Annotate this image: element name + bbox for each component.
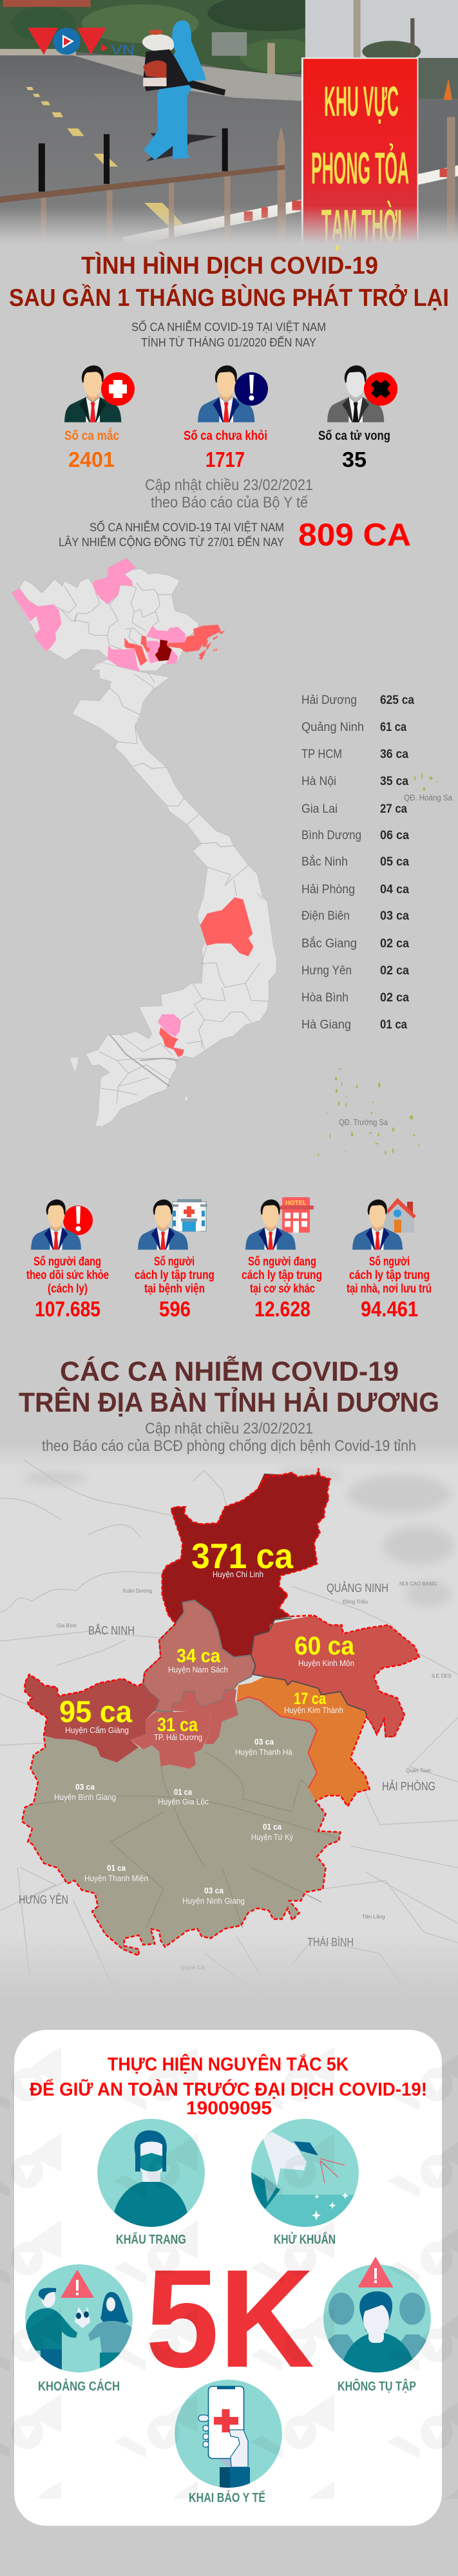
label: Kinh Mon: Huyện Kinh Môn (298, 1658, 354, 1668)
icon: man with hotel (245, 1197, 314, 1249)
label: Thanh Ha: 03 ca (254, 1737, 274, 1747)
islands: Truong Sa (318, 1068, 420, 1157)
legend: cases by province: Hải Dương (301, 694, 357, 707)
legend: cases by province: Bình Dương (301, 829, 361, 842)
hero fade into page (0, 206, 458, 243)
stat: home quarantine: cách ly tập trung (349, 1269, 430, 1282)
legend: cases by province: TP HCM (301, 748, 342, 761)
label: Thanh Mien: Huyện Thanh Miện (84, 1873, 148, 1883)
label: Kim Thanh: Huyện Kim Thành (284, 1705, 343, 1715)
label: mask: KHẨU TRANG (116, 2232, 186, 2247)
label: medical declaration: KHAI BÁO Y TẾ (189, 2490, 265, 2505)
label: TP Hai Duong: 31 ca (157, 1714, 198, 1736)
community cases callout: LÂY NHIỄM CỘNG ĐỒNG TỪ 27/01 ĐẾN NAY (59, 535, 284, 549)
province: Binh Duong (158, 1014, 181, 1037)
label: Gia Loc (158, 1787, 209, 1806)
stat: people monitored: Số người đang (33, 1255, 101, 1269)
VOV logo: VN (111, 42, 135, 58)
community cases callout (59, 518, 411, 553)
label: Thanh Mien: 01 ca (107, 1863, 126, 1873)
legend: cases by province: 625 ca (380, 694, 414, 707)
stat: home quarantine (347, 1198, 432, 1321)
map region: central and south (70, 662, 276, 1126)
icon: medical declaration phone (175, 2380, 282, 2490)
province: Quang Ninh (166, 625, 225, 660)
label: Nam Sach (168, 1645, 228, 1674)
label: TP Hai Duong: TP. Hải Dương (154, 1732, 202, 1742)
label: Binh Giang: 03 ca (75, 1782, 95, 1792)
stat: hospital quarantine: tại bệnh viện (144, 1282, 205, 1296)
legend: cases by province: 02 ca (380, 937, 409, 951)
map: Hai Duong base terrain (0, 1443, 458, 1998)
legend: cases by province: Hòa Bình (301, 991, 348, 1005)
map: Hai Duong base terrain: Quỳnh Côi (180, 1965, 205, 1971)
label: Nam Sach: Huyện Nam Sách (168, 1665, 228, 1674)
label: distance: KHOẢNG CÁCH (38, 2379, 120, 2394)
islands: Hoang Sa (404, 773, 452, 802)
district: Nam Sach (143, 1600, 256, 1712)
legend: cases by province: 27 ca (380, 802, 407, 816)
heading: Hai Duong section: TRÊN ĐỊA BÀN TỈNH HẢI DƯƠNG (19, 1387, 439, 1418)
title (9, 251, 449, 312)
stat: other facility quarantine: 12.628 (254, 1297, 310, 1321)
label: Ninh Giang: Huyện Ninh Giang (182, 1896, 245, 1906)
province: Dien Bien (12, 588, 62, 652)
stat: hospital quarantine: Số người (154, 1255, 195, 1269)
legend: cases by province: 61 ca (380, 721, 406, 734)
stat: home quarantine: Số người (369, 1255, 410, 1269)
stat: hospital quarantine (135, 1199, 215, 1321)
icon: man with medical cross (64, 365, 135, 422)
label: Ninh Giang: 03 ca (204, 1886, 224, 1895)
map: Vietnam provinces (12, 558, 452, 1157)
subtitle: SỐ CA NHIỄM COVID-19 TẠI VIỆT NAM (131, 320, 326, 334)
district: Cam Giang (25, 1674, 159, 1763)
label: Tu Ky: 01 ca (263, 1822, 282, 1832)
province: Bac Ninh (147, 641, 161, 650)
legend: cases by province: Hà Giang (301, 1018, 351, 1032)
stat: other facility quarantine: cách ly tập trung (242, 1269, 322, 1282)
label: Tu Ky (251, 1822, 293, 1842)
update note: Hai Duong: theo Báo cáo của BCĐ phòng chống dịch bệnh Covid-19 tỉnh (42, 1437, 416, 1455)
map: Hai Duong base terrain: BẮC NINH (88, 1624, 135, 1637)
legend: cases by province: 36 ca (380, 748, 408, 761)
stat: deaths: 35 (342, 448, 367, 471)
label: no gathering: KHÔNG TỤ TẬP (338, 2378, 416, 2394)
stat: home quarantine: 94.461 (361, 1297, 418, 1321)
legend: cases by province: 02 ca (380, 991, 409, 1005)
label: Cam Giang: Huyện Cẩm Giàng (65, 1725, 129, 1735)
province: Hung Yen (147, 650, 159, 663)
panel heading (30, 2053, 427, 2119)
label: Thanh Mien (84, 1863, 148, 1883)
stat: active cases (184, 365, 268, 471)
stat: people monitored: theo dõi sức khỏe (26, 1269, 109, 1282)
map: Hai Duong base terrain: Đông Triều (343, 1599, 368, 1605)
districts with 01-03 cases (22, 1697, 340, 1956)
label: Binh Giang (54, 1782, 116, 1802)
district: TP Hai Duong (130, 1689, 238, 1769)
province: Bac Giang red strip (140, 636, 150, 652)
community cases callout: 809 CA (298, 518, 411, 553)
label: Binh Giang: Huyện Bình Giang (54, 1792, 116, 1802)
province: Hoa Binh (108, 645, 140, 674)
icon: keep distance (25, 2264, 134, 2375)
label: Thanh Ha (235, 1737, 293, 1757)
stat: people monitored: (cách ly) (48, 1282, 88, 1296)
legend: cases by province: Quảng Ninh (301, 721, 364, 734)
hero photo: disinfection worker and lockdown sign (0, 0, 458, 258)
province: Ha Giang (92, 558, 136, 604)
province: Ha Noi (124, 638, 148, 666)
community cases callout: SỐ CA NHIỄM COVID-19 TẠI VIỆT NAM (90, 520, 284, 534)
icon: man with house (352, 1198, 416, 1249)
legend: cases by province: 04 ca (380, 883, 409, 896)
legend: cases by province: 05 ca (380, 855, 409, 869)
legend: cases by province (301, 694, 414, 1032)
map: Hai Duong base terrain: QUẢNG NINH (327, 1581, 388, 1595)
update note: Hai Duong: Cập nhật chiều 23/02/2021 (145, 1420, 313, 1437)
stat: active cases: 1717 (205, 448, 245, 471)
panel heading: ĐỂ GIỮ AN TOÀN TRƯỚC ĐẠI DỊCH COVID-19! (30, 2078, 427, 2100)
stat: hospital quarantine: cách ly tập trung (135, 1269, 215, 1282)
province: Hai Phong (166, 649, 178, 665)
islands: Truong Sa: QĐ. Trường Sa (339, 1118, 388, 1127)
icon: no gathering (323, 2257, 431, 2372)
map: Hai Duong base terrain: Tiên Lãng (362, 1914, 385, 1920)
legend: cases by province: Điện Biên (301, 909, 350, 923)
legend: cases by province: 35 ca (380, 775, 408, 788)
big 5K: 5K (146, 2240, 314, 2396)
subtitle: TÍNH TỪ THÁNG 01/2020 ĐẾN NAY (141, 336, 316, 349)
map: Hai Duong base terrain: HƯNG YÊN (19, 1893, 68, 1906)
icon: man with exclamation badge (198, 365, 268, 422)
stat: other facility quarantine: tại cơ sở khác (250, 1282, 315, 1296)
label: Gia Loc: 01 ca (174, 1787, 193, 1797)
legend: cases by province: 03 ca (380, 909, 409, 923)
map: Hai Duong base terrain: Quán Toan (406, 1768, 431, 1774)
district: Kim Thanh (236, 1676, 370, 1806)
subtitle (131, 320, 326, 349)
stat: people monitored (26, 1199, 109, 1321)
province: TP HCM (159, 1027, 184, 1057)
update note (145, 477, 313, 511)
stat: hospital quarantine: 596 (159, 1297, 191, 1321)
legend: cases by province: Gia Lai (301, 802, 338, 816)
map: Hai Duong base terrain: HẢI PHÒNG (382, 1779, 435, 1793)
title: TÌNH HÌNH DỊCH COVID-19 (81, 251, 378, 279)
stat: people monitored: 107.685 (35, 1297, 100, 1321)
stat: home quarantine: tại nhà, nơi lưu trú (347, 1282, 432, 1296)
stat: total cases (64, 365, 135, 471)
panel: 5K rule (14, 2030, 442, 2526)
label: Gia Loc: Huyện Gia Lộc (158, 1797, 209, 1806)
label: Kinh Mon: 60 ca (294, 1632, 355, 1660)
map: Hai Duong districts (22, 1468, 419, 1956)
legend: cases by province: 01 ca (380, 1018, 407, 1032)
icon: man with hospital (138, 1199, 207, 1249)
label: Chi Linh: Huyện Chí Linh (213, 1569, 263, 1579)
stat: total cases: 2401 (68, 448, 115, 471)
stat: other facility quarantine (242, 1197, 322, 1321)
icon: man with hotel: HOTEL (285, 1200, 307, 1207)
label: TP Hai Duong (154, 1714, 202, 1742)
watermark pattern (0, 2048, 458, 2499)
label: Chi Linh: 371 ca (191, 1536, 293, 1576)
legend: cases by province: Bắc Giang (301, 936, 357, 951)
heading: Hai Duong section: CÁC CA NHIỄM COVID-19 (60, 1356, 399, 1387)
label: disinfection: KHỬ KHUẨN (274, 2231, 336, 2247)
province: Bac Giang (146, 626, 186, 643)
islands: Hoang Sa: QĐ. Hoàng Sa (404, 793, 452, 802)
province boundary, dashed (22, 1468, 419, 1956)
map: Hai Duong base terrain: THÁI BÌNH (307, 1936, 354, 1949)
panel heading: THỰC HIỆN NGUYÊN TẮC 5K (108, 2053, 348, 2075)
stat: other facility quarantine: Số người đang (248, 1255, 316, 1269)
icon: man with warning badge (31, 1199, 93, 1249)
label: Ninh Giang (182, 1886, 245, 1906)
label: Nam Sach: 34 ca (177, 1645, 220, 1667)
icon: disinfection spray (251, 2119, 359, 2227)
stat: active cases: Số ca chưa khỏi (184, 429, 267, 443)
heading: Hai Duong section (19, 1356, 439, 1418)
label: Tu Ky: Huyện Tứ Kỳ (251, 1832, 293, 1842)
stat: deaths (318, 365, 397, 471)
map: Hai Duong base terrain: Xuân Dương (122, 1588, 152, 1594)
map: Hai Duong base terrain: NÚI CAO BANG (399, 1581, 437, 1587)
icon: face mask (97, 2119, 205, 2227)
legend: cases by province: 02 ca (380, 964, 409, 978)
label: Thanh Ha: Huyện Thanh Hà (235, 1747, 293, 1757)
label: Kim Thanh: 17 ca (294, 1690, 327, 1708)
label: Cam Giang: 95 ca (59, 1694, 133, 1728)
update note: theo Báo cáo của Bộ Y tế (151, 494, 309, 511)
province: Gia Lai (200, 897, 254, 956)
map: Hai Duong base terrain: ILE DES (432, 1673, 452, 1679)
sign lettering (311, 77, 409, 252)
map: Hai Duong base terrain: Gia Bình (57, 1623, 77, 1629)
update note: Hai Duong (42, 1420, 416, 1455)
stat: total cases: Số ca mắc (64, 428, 119, 443)
legend: cases by province: 06 ca (380, 829, 409, 842)
legend: cases by province: Hưng Yên (301, 964, 352, 978)
district: Chi Linh (162, 1468, 330, 1657)
legend: cases by province: Hà Nội (301, 775, 336, 788)
stat: deaths: Số ca tử vong (318, 429, 390, 443)
legend: cases by province: Bắc Ninh (301, 855, 348, 869)
island: Phu Quoc (70, 1057, 79, 1072)
island: Con Dao (186, 1097, 187, 1101)
panel heading: 19009095 (186, 2098, 272, 2119)
map region: north (12, 558, 225, 674)
district: Kinh Mon (251, 1615, 419, 1737)
VOV logo (28, 28, 135, 58)
legend: cases by province: Hải Phòng (301, 883, 355, 896)
label: Kim Thanh (284, 1690, 343, 1715)
icon: grey man with black cross badge (327, 365, 397, 422)
update note: Cập nhật chiều 23/02/2021 (145, 477, 313, 494)
province: Hai Duong (155, 639, 172, 661)
